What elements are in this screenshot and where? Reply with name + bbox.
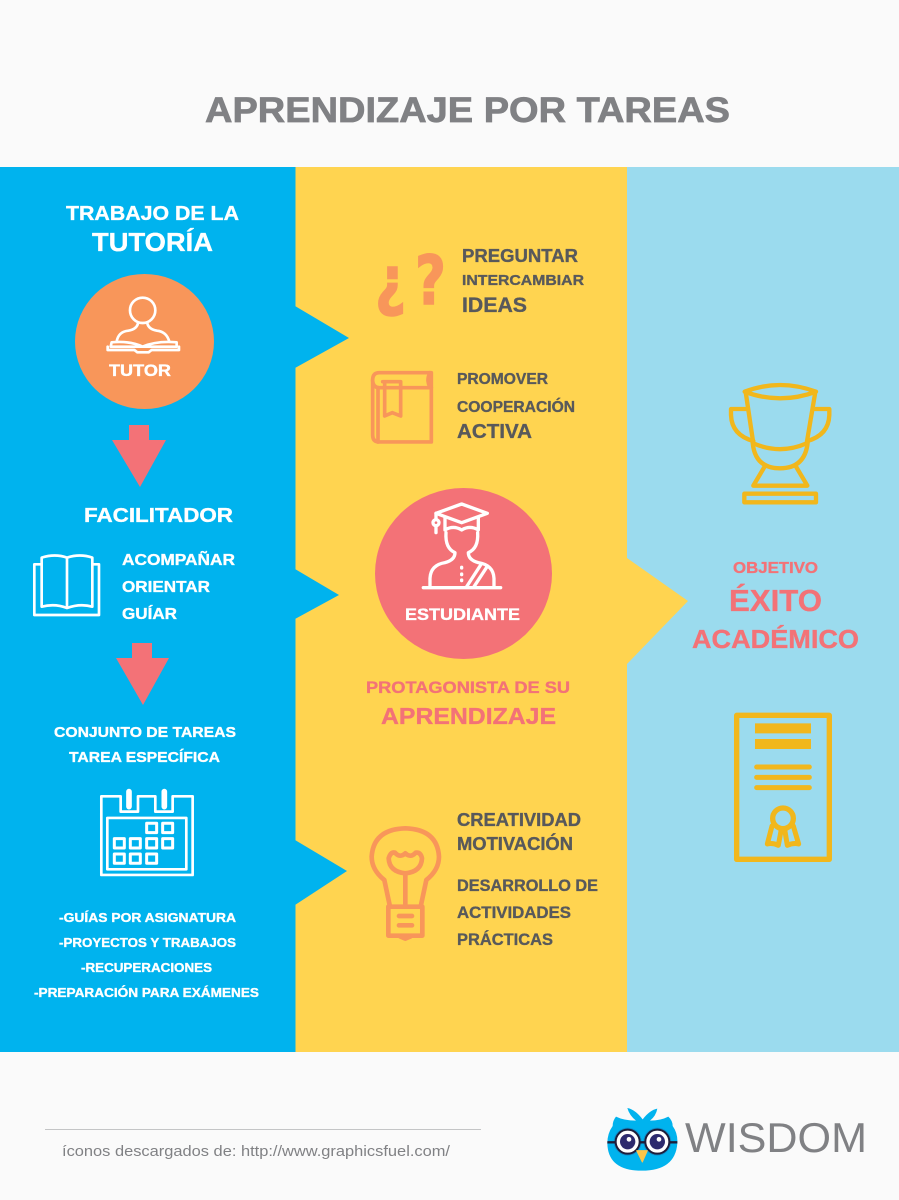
text: creativity and practical activities: MOTIVACIÓN: [457, 833, 573, 854]
student badge: [375, 488, 552, 659]
text: facilitator actions: GUÍAR: [122, 604, 177, 623]
text: creativity and practical activities: DESARROLLO DE: [457, 876, 598, 895]
icon: question marks: ¿: [375, 242, 406, 319]
heading: tutoring work: TRABAJO DE LA: [66, 203, 239, 225]
arrow: down 1: [112, 425, 166, 487]
heading: facilitator: FACILITADOR: [84, 505, 234, 527]
text: facilitator actions: ACOMPAÑAR: [122, 549, 235, 569]
arrow: to creativity: [295, 840, 347, 905]
arrow: to student: [295, 569, 339, 619]
label: tutor: TUTOR: [109, 362, 171, 380]
objective heading: success: ÉXITO: [729, 583, 822, 618]
heading: tutoring work: TUTORÍA: [92, 227, 213, 257]
text: task set: CONJUNTO DE TAREAS: [54, 724, 236, 741]
objective label: OBJETIVO: [733, 560, 818, 577]
text: creativity and practical activities: CREATIVIDAD: [457, 810, 581, 830]
panel: tutoring: [0, 167, 349, 1052]
icon: calendar: [101, 792, 193, 875]
text: protagonist of learning: APRENDIZAJE: [381, 703, 556, 729]
arrow: to ideas: [295, 306, 349, 368]
text: protagonist of learning: [366, 679, 570, 729]
text: ask and exchange ideas: IDEAS: [462, 294, 527, 317]
footer credit: íconos descargados de: http://www.graphicsfuel.com/: [62, 1143, 451, 1160]
text: creativity and practical activities: ACTIVIDADES: [457, 903, 571, 922]
icon: question marks: ?: [415, 242, 446, 321]
panel: student: [295, 167, 688, 1052]
objective heading: academic: ACADÉMICO: [692, 624, 859, 654]
icon: open book: [34, 555, 99, 615]
text: task list: -PREPARACIÓN PARA EXÁMENES: [34, 985, 259, 1000]
icon: question marks: [375, 242, 446, 321]
text: ask and exchange ideas: INTERCAMBIAR: [462, 272, 584, 289]
text: task list: -GUÍAS POR ASIGNATURA: [59, 910, 237, 925]
icon: light bulb: [372, 828, 439, 939]
tutor badge: [75, 274, 214, 409]
text: task list: [34, 910, 259, 1000]
text: ask and exchange ideas: [462, 246, 584, 317]
text: task list: -PROYECTOS Y TRABAJOS: [59, 935, 236, 950]
heading: tutoring work: [66, 203, 239, 257]
text: task list: -RECUPERACIONES: [81, 960, 212, 975]
icon: diploma: [737, 715, 829, 859]
wordmark: WISDOM: [685, 1114, 867, 1161]
text: promote cooperation: [457, 371, 575, 443]
text: promote cooperation: PROMOVER: [457, 371, 548, 388]
icon: book with bookmark: [373, 373, 431, 442]
label: student: ESTUDIANTE: [405, 605, 520, 624]
icon: trophy: [731, 385, 829, 502]
arrow: to objective: [627, 558, 688, 664]
icon: graduate: [423, 504, 501, 588]
text: task set: [54, 724, 236, 766]
text: protagonist of learning: PROTAGONISTA DE SU: [366, 679, 570, 697]
icon: owl: [607, 1108, 677, 1171]
text: promote cooperation: ACTIVA: [457, 421, 532, 443]
title: APRENDIZAJE POR TAREAS: [205, 91, 730, 130]
panel: objective: [627, 167, 899, 1052]
text: promote cooperation: COOPERACIÓN: [457, 398, 575, 416]
arrow: down 2: [116, 643, 169, 705]
text: creativity and practical activities: [457, 810, 598, 949]
text: task set: TAREA ESPECÍFICA: [69, 749, 220, 766]
text: creativity and practical activities: PRÁCTICAS: [457, 930, 553, 949]
logo: wisdom: [607, 1108, 867, 1171]
text: facilitator actions: ORIENTAR: [122, 579, 210, 596]
icon: reader: [108, 298, 179, 352]
text: facilitator actions: [122, 549, 235, 623]
text: ask and exchange ideas: PREGUNTAR: [462, 246, 578, 266]
